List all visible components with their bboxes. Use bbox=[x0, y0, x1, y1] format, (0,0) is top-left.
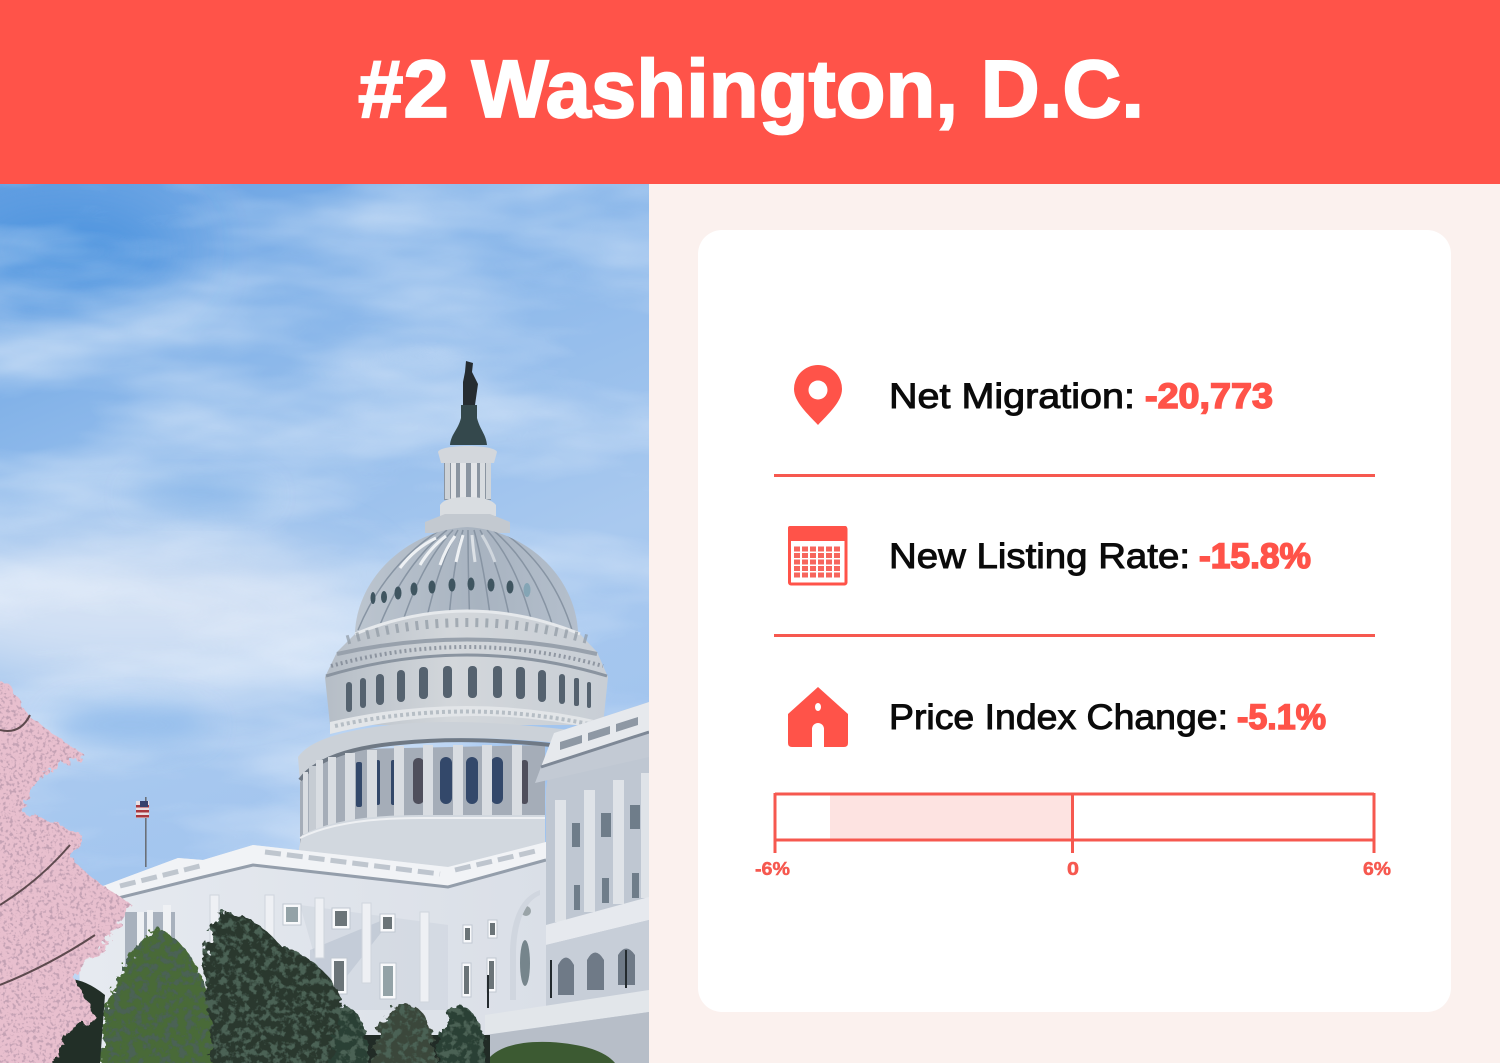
photo: U.S. Capitol building with cherry blossoms bbox=[0, 184, 649, 1063]
dome shell bbox=[355, 527, 578, 632]
right wing of the building bbox=[485, 702, 649, 1063]
peristyle windows bbox=[356, 757, 528, 807]
dome base bbox=[299, 815, 545, 868]
centre wing of the building bbox=[79, 842, 546, 1063]
new listing rate stat: New Listing Rate: bbox=[889, 537, 1190, 576]
columns bbox=[555, 773, 649, 922]
title: #2 Washington, D.C. bbox=[358, 44, 1144, 135]
peristyle columns bbox=[303, 745, 522, 834]
peristyle bbox=[300, 745, 545, 848]
new listing rate stat bbox=[889, 537, 1311, 576]
tholos cap bbox=[450, 405, 487, 445]
bar value bbox=[830, 794, 1072, 840]
net migration stat: Net Migration: bbox=[889, 377, 1135, 416]
dome windows bbox=[370, 578, 530, 604]
balustrade bbox=[560, 717, 638, 750]
cherry blossom tree bbox=[0, 676, 132, 1063]
axis labels bbox=[755, 859, 1391, 879]
icon: calendar bbox=[788, 526, 847, 584]
icon: house bbox=[788, 687, 848, 747]
header banner bbox=[0, 0, 1500, 184]
flag and pole bbox=[136, 797, 149, 867]
wing windows bbox=[572, 805, 640, 910]
drum windows bbox=[346, 666, 591, 712]
price index change stat: Price Index Change: bbox=[889, 698, 1228, 737]
tholos bbox=[444, 463, 491, 500]
sky with clouds bbox=[0, 184, 649, 1063]
rusticated base with arches bbox=[546, 920, 649, 1020]
net migration stat bbox=[889, 377, 1273, 416]
range bar chart bbox=[755, 793, 1391, 879]
net migration stat: -20,773 bbox=[1145, 377, 1273, 416]
shaded portico on the left wing bbox=[125, 912, 175, 972]
wing columns bbox=[137, 905, 171, 946]
icon: location pin bbox=[794, 365, 842, 425]
dome bbox=[298, 361, 608, 868]
balcony bbox=[546, 897, 649, 945]
statue of freedom bbox=[463, 361, 478, 405]
panel: metrics card bbox=[698, 230, 1451, 1012]
trees bbox=[40, 912, 615, 1063]
axis labels: 6% bbox=[1363, 859, 1391, 879]
price index change stat: -5.1% bbox=[1237, 698, 1326, 737]
drum balustrade bbox=[330, 706, 603, 734]
axis labels: 0 bbox=[1067, 859, 1079, 879]
wing windows bbox=[283, 904, 497, 999]
upper drum bbox=[325, 611, 608, 725]
axis labels: -6% bbox=[755, 859, 790, 879]
new listing rate stat: -15.8% bbox=[1199, 537, 1311, 576]
